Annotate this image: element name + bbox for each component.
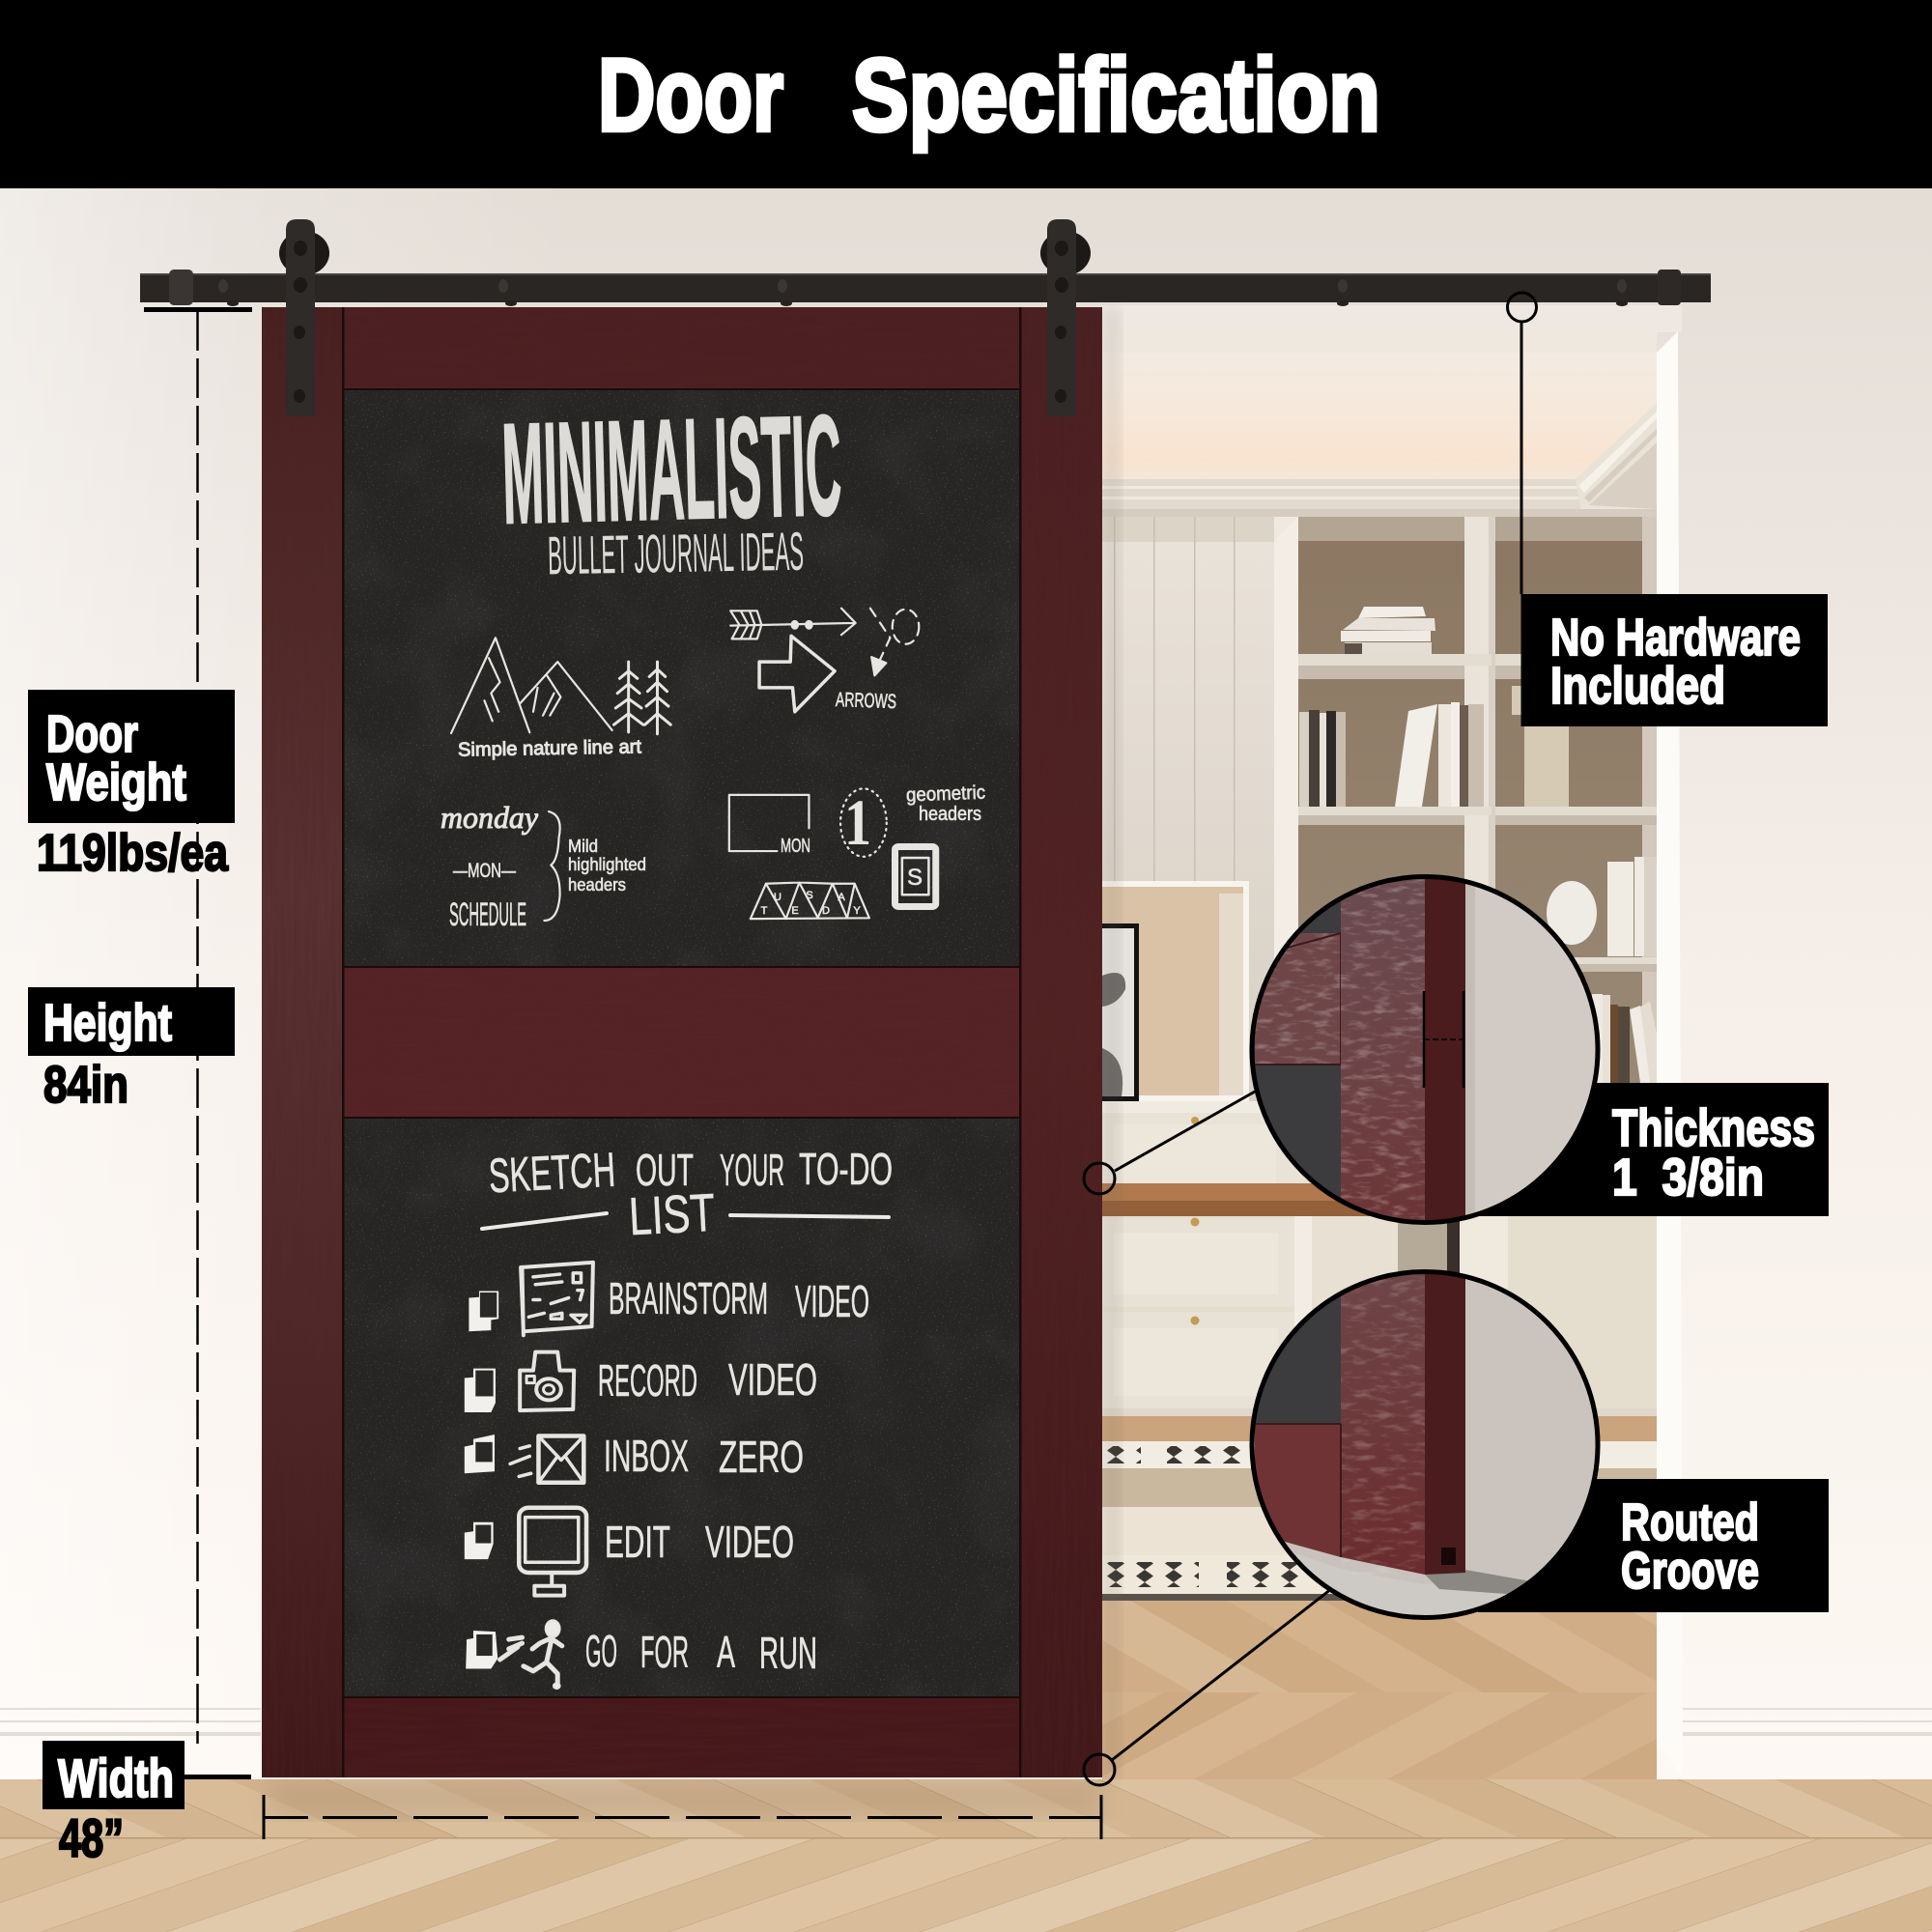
- to-do row: record video: VIDEO: [728, 1354, 817, 1405]
- vase: [1547, 881, 1597, 945]
- track stops: [169, 270, 193, 305]
- to-do row: go for a run: FOR: [640, 1627, 689, 1677]
- middle rail: [344, 967, 1020, 1118]
- wood floor: [0, 1779, 1932, 1932]
- to-do row: brainstorm video: [469, 1263, 869, 1335]
- bottom rail: [344, 1697, 1020, 1777]
- chalk: geometric headers: 1: [844, 785, 871, 859]
- chalk: to-do heading: SKETCH: [488, 1143, 616, 1203]
- to-do row: inbox zero: INBOX: [604, 1431, 689, 1481]
- track bolts: [218, 279, 1627, 293]
- to-do row: go for a run: A: [717, 1627, 735, 1677]
- room seen through doorway: [1102, 331, 1657, 1779]
- desk top: [1102, 1183, 1370, 1216]
- wood grain: [262, 307, 1102, 1777]
- chalk: heading minimalistic: [500, 385, 843, 585]
- lower right books: [1592, 994, 1657, 1083]
- bottom chalkboard panel: [344, 1118, 1020, 1697]
- callout: door weight: Door: [46, 705, 138, 763]
- detail circle: door thickness: [1246, 869, 1601, 1227]
- callout: door weight: [28, 690, 235, 882]
- chalk: geometric headers: T: [761, 905, 768, 917]
- panelled wall: [1102, 517, 1286, 1106]
- chalk: geometric headers: MON: [781, 836, 810, 857]
- chalk: mountains and trees: Simple nature line art: [458, 736, 642, 761]
- callout: width: Width: [58, 1747, 174, 1808]
- chalk: geometric headers: geometric: [906, 782, 985, 806]
- chalk: geometric headers: U: [774, 892, 781, 903]
- to-do row: go for a run: GO: [585, 1626, 617, 1676]
- top rail: [344, 307, 1020, 389]
- infographic: door specification: MINIMALISTIC: [500, 385, 843, 554]
- to-do row: edit video: EDIT: [605, 1517, 670, 1567]
- chalk: arrows: [730, 609, 919, 713]
- right door hanger: [1047, 219, 1076, 416]
- barn door track: [140, 270, 1711, 306]
- chalk: geometric headers: D: [822, 905, 830, 917]
- left door wheel: [279, 231, 329, 275]
- callout: no hardware included: No Hardware: [1550, 609, 1801, 667]
- right stile: [1020, 307, 1102, 1777]
- to-do row: brainstorm video: VIDEO: [795, 1276, 869, 1326]
- chalk: to-do heading: TO-DO: [799, 1144, 893, 1194]
- to-do row: inbox zero: [465, 1431, 804, 1483]
- width dimension line: [263, 1795, 1103, 1839]
- bookshelf: [1274, 517, 1657, 1116]
- chalk: to-do heading: YOUR: [720, 1145, 784, 1195]
- door: [262, 307, 1122, 1777]
- chalk: geometric headers: S: [907, 865, 923, 891]
- chalk: to-do heading: [482, 1143, 893, 1246]
- chalk: geometric headers: E: [791, 905, 799, 917]
- chalk: to-do heading: LIST: [628, 1182, 717, 1246]
- callout: routed groove: Groove: [1621, 1542, 1759, 1600]
- to-do row: edit video: [465, 1508, 794, 1596]
- header bar: [0, 0, 1932, 188]
- infographic: door specification: BULLET JOURNAL IDEAS: [547, 521, 804, 585]
- chalk: highlighted headers: [440, 800, 646, 933]
- callout: thickness: 1 3/8in: [1612, 1149, 1764, 1207]
- framed artwork: [1102, 881, 1249, 1101]
- callout: thickness: Thickness: [1612, 1099, 1815, 1157]
- height dimension line: [144, 307, 252, 1779]
- chalk: geometric headers: S: [806, 890, 813, 901]
- callout: thickness: [1084, 869, 1829, 1227]
- chalk: geometric headers: headers: [919, 804, 981, 825]
- detail circle: routed groove: [1246, 1265, 1604, 1623]
- callout: no hardware included: [1507, 293, 1828, 726]
- upper right books: [1607, 857, 1657, 956]
- chalk: mountains and trees: [451, 638, 670, 761]
- callout: height: 84in: [43, 1056, 128, 1114]
- chalk: highlighted headers: SCHEDULE: [449, 896, 526, 933]
- to-do row: go for a run: [466, 1620, 817, 1689]
- sculpture: [1512, 686, 1569, 807]
- cabinet and drawers: [1102, 1101, 1657, 1416]
- chalk: to-do heading: OUT: [636, 1145, 694, 1195]
- chalk: highlighted headers: monday: [440, 800, 539, 835]
- to-do row: edit video: VIDEO: [705, 1517, 794, 1567]
- chalk: geometric headers: A: [838, 892, 845, 903]
- callout: height: [28, 987, 235, 1114]
- callout: height: Height: [43, 994, 172, 1052]
- title: Specification: [852, 37, 1380, 153]
- ceiling: [1102, 353, 1657, 479]
- top chalkboard panel: [344, 389, 1020, 967]
- callout: no hardware included: Included: [1550, 657, 1725, 715]
- book stack: [1341, 607, 1435, 654]
- callout: routed groove: [1084, 1265, 1829, 1785]
- chalk: highlighted headers: —MON—: [453, 860, 516, 882]
- to-do row: record video: RECORD: [598, 1355, 697, 1406]
- chalk: highlighted headers: highlighted: [568, 855, 646, 874]
- title: Door: [598, 37, 783, 153]
- callout: width: [43, 1741, 185, 1868]
- chalk: arrows: ARROWS: [836, 689, 896, 713]
- right door wheel: [1040, 231, 1091, 275]
- chalk: geometric headers: [729, 782, 985, 919]
- callout: door weight: Weight: [46, 753, 186, 811]
- left door hanger: [286, 219, 315, 416]
- title: [598, 37, 1380, 153]
- doorway white reveal: [1657, 331, 1683, 1777]
- chalk: highlighted headers: headers: [568, 875, 626, 895]
- callout: door weight: 119lbs/ea: [37, 824, 229, 882]
- panel edges: [342, 307, 1022, 1777]
- to-do row: inbox zero: ZERO: [719, 1432, 804, 1482]
- callout: width: 48”: [59, 1807, 124, 1868]
- room floor and rug: [1102, 1416, 1657, 1779]
- callout: routed groove: Routed: [1621, 1493, 1759, 1551]
- to-do row: go for a run: RUN: [759, 1628, 817, 1678]
- skirting boards: [0, 1708, 1932, 1736]
- left stile: [262, 307, 343, 1777]
- to-do row: record video: [465, 1352, 817, 1412]
- chalk dust: [344, 389, 1020, 1697]
- books row: [1299, 702, 1484, 807]
- chalk: geometric headers: Y: [853, 905, 861, 917]
- to-do row: brainstorm video: BRAINSTORM: [609, 1273, 768, 1323]
- chalk: highlighted headers: Mild: [568, 837, 598, 856]
- crown moulding: [1102, 403, 1657, 517]
